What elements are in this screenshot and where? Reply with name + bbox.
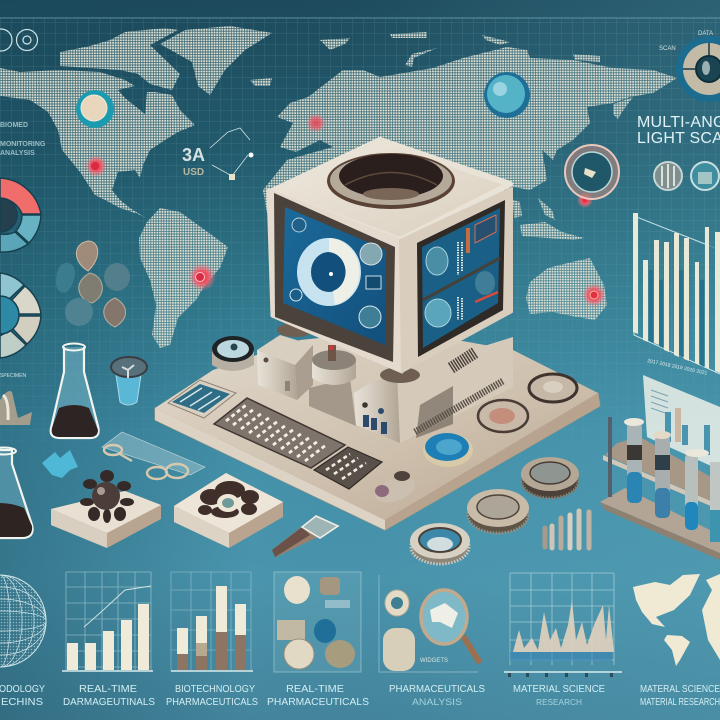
instrument: central column (309, 345, 356, 426)
left partial text block: ANALYSIS (0, 150, 35, 157)
left partial text block: BIOMED (0, 122, 28, 129)
top left round icons (0, 29, 38, 51)
molecule block (51, 470, 161, 548)
Greenland (160, 26, 272, 95)
label: biotechnology (166, 683, 258, 708)
row of small pins (545, 511, 589, 548)
top right dial icon (659, 31, 720, 102)
bar chart right: 2017 2018 2019 2020 2021 (647, 358, 708, 377)
cream world map (633, 574, 720, 666)
blue crystal (42, 450, 78, 478)
pin: Asia (577, 192, 593, 208)
blue sample dish (423, 433, 473, 467)
magnifier panel: WIDGETS (420, 658, 448, 664)
flower block (174, 473, 283, 548)
magnifier panel (379, 575, 480, 672)
world map: dotted continents (0, 26, 677, 348)
label: pharmaceuticals: PHARMACEUTICALS (389, 683, 485, 695)
left small apparatus with caption: SPECIMEN (0, 373, 27, 379)
keypad (314, 447, 382, 489)
left partial text block (0, 122, 46, 157)
pin: Mexico (85, 155, 107, 177)
globe wireframe (0, 575, 46, 667)
bar chart: real-time (62, 572, 153, 671)
circular sensor icon (565, 145, 619, 199)
pin: Brazil (188, 263, 216, 291)
top sample well (327, 153, 455, 209)
label: biology: ECHINS (1, 696, 43, 708)
left screen bezel (274, 193, 395, 362)
small network diagram with 3A label (182, 128, 254, 180)
right face (400, 188, 512, 372)
label: pharmaceuticals: ANALYSIS (412, 697, 462, 707)
right screen bezel (417, 200, 505, 357)
label: material science: RESEARCH (536, 698, 582, 707)
beaker icon (111, 357, 147, 405)
North America (0, 68, 195, 218)
report panel (643, 375, 720, 470)
erlenmeyer flask upper (51, 344, 99, 438)
label: biotechnology: BIOTECHNOLOGY (175, 683, 255, 695)
small round gauges (654, 162, 719, 190)
bar chart right (633, 213, 720, 377)
instrument: right lower unit (354, 337, 513, 443)
keyboard (214, 398, 345, 468)
left small apparatus with caption (0, 373, 32, 425)
Eurasia and Africa (263, 47, 677, 300)
mountain spectrum chart (504, 573, 622, 677)
South America (139, 208, 228, 348)
label: material science: MATERIAL SCIENCE (513, 683, 605, 695)
small network diagram with 3A label: 3A (182, 145, 205, 165)
ring lens centre (467, 489, 529, 533)
label: biology: ODOLOGY (0, 683, 45, 695)
eye lens sample on platform (372, 471, 418, 508)
map pins (85, 113, 606, 307)
label: material science (513, 683, 605, 707)
label: real-time 2: PHARMACEUTICALS (267, 696, 369, 708)
top right dial icon: SCAN (659, 46, 676, 52)
multi-angle light scattering heading (637, 114, 720, 147)
sample panel (274, 572, 361, 672)
left partial text block: MONITORING (0, 141, 46, 148)
stacked bar chart: biotechnology (171, 572, 253, 671)
pin: Europe (306, 113, 326, 133)
label: real-time 1 (63, 683, 155, 708)
Southeast Asia islands (513, 198, 584, 240)
label: material research (640, 683, 720, 708)
label: biology (0, 683, 45, 708)
film strip and rings (102, 432, 205, 479)
donut chart left lower (0, 273, 41, 358)
Australia (526, 258, 607, 320)
erlenmeyer flask lower (0, 448, 33, 538)
Arctic islands (320, 32, 600, 67)
Iceland (250, 78, 272, 86)
label: real-time 1: REAL-TIME (79, 683, 137, 695)
left face (268, 190, 402, 372)
instrument: main cube (268, 140, 512, 372)
label: real-time 2 (267, 683, 369, 708)
bottom labels (0, 683, 720, 708)
Kamchatka (613, 97, 633, 119)
cluster of sample droplets (56, 241, 130, 327)
platform base (155, 330, 600, 530)
right screen (422, 208, 500, 348)
label: real-time 2: REAL-TIME (286, 683, 344, 695)
memory stick icon (272, 516, 338, 557)
pin: Australia (582, 283, 606, 307)
top face (270, 140, 510, 240)
ring lens front (410, 523, 470, 564)
knurled lens rings (410, 457, 579, 564)
small lens canister (212, 336, 254, 371)
small data tablet on platform (168, 380, 236, 418)
icon: sample disc over North America (76, 90, 114, 128)
test tube rack (600, 417, 720, 560)
donut chart left top (0, 178, 41, 252)
ring lens large (521, 457, 579, 498)
label: biotechnology: PHARMACEUTICALS (166, 696, 258, 708)
lens discs on platform (478, 374, 577, 432)
top right dial icon: DATA (698, 31, 713, 37)
instrument: left lower unit (257, 335, 313, 400)
small network diagram with 3A label: USD (183, 167, 204, 178)
bottom panels (0, 572, 720, 677)
instrument feet (277, 323, 420, 383)
test tubes (624, 418, 720, 542)
Arctic archipelago (60, 28, 180, 90)
label: pharmaceuticals (389, 683, 485, 707)
donut on screen (304, 245, 354, 299)
icon: globe disc over Asia (484, 72, 530, 118)
left screen (283, 207, 386, 345)
label: real-time 1: DARMAGEUTINALS (63, 696, 155, 708)
